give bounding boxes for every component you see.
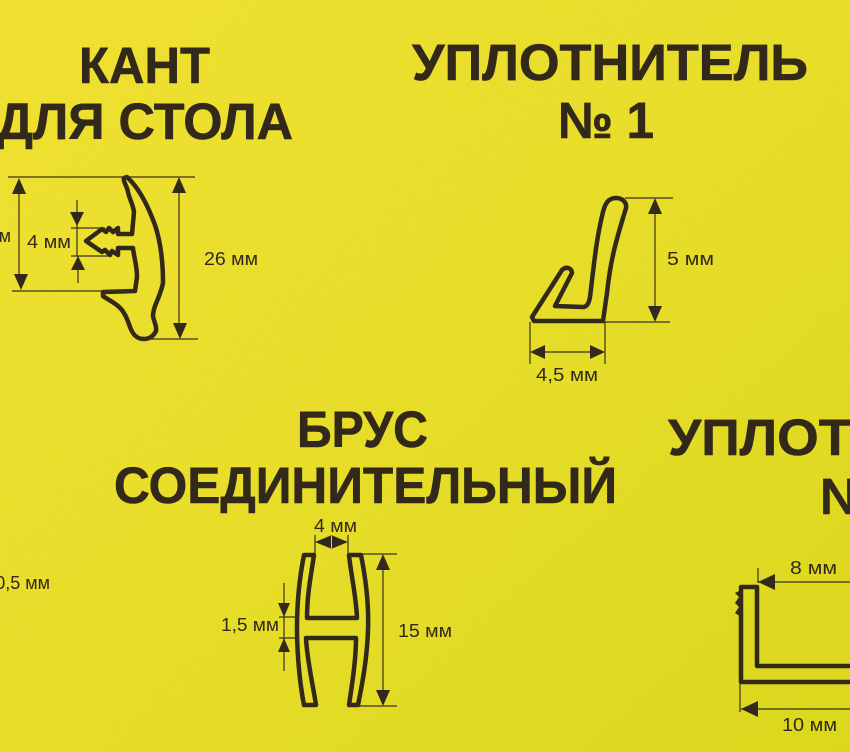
label: 26 mm: 26 мм — [204, 249, 258, 269]
label: 1.5 mm: 1,5 мм — [221, 615, 279, 635]
dimension lines: seal no. 1 — [530, 198, 673, 364]
label: 10 mm: 10 мм — [782, 715, 837, 735]
label: 15 mm: 15 мм — [398, 621, 452, 641]
dimension lines: connecting bar — [278, 535, 397, 706]
heading: connecting bar — [114, 401, 617, 514]
heading: table edging — [0, 37, 293, 150]
profile drawing: table edging — [86, 177, 163, 339]
label: 8 mm: 8 мм — [790, 558, 837, 578]
label: 5 mm: 5 мм — [667, 249, 714, 269]
panel: table edging — [0, 37, 293, 339]
profile drawing: seal no. 1 — [532, 198, 626, 321]
heading: seal no. 1: УПЛОТНИТЕЛЬ — [412, 34, 808, 91]
heading: seal no. 1 — [412, 34, 808, 149]
heading: connecting bar: СОЕДИНИТЕЛЬНЫЙ — [114, 456, 617, 514]
heading: seal no. 2 — [668, 409, 850, 525]
dimension lines: seal no. 2 — [740, 568, 850, 717]
heading: connecting bar: БРУС — [297, 401, 428, 458]
heading: table edging: КАНТ — [79, 37, 210, 94]
profile drawing: connecting bar — [297, 555, 368, 705]
heading: seal no. 1: № 1 — [558, 92, 654, 149]
profile drawing: seal no. 2 — [741, 587, 850, 682]
panel: seal no. 2 — [668, 409, 850, 735]
profile teeth — [735, 590, 741, 617]
label: 4.5 mm: 4,5 мм — [536, 365, 598, 385]
label: 4 mm: 4 мм — [314, 516, 357, 536]
dimension lines: table edging — [8, 177, 198, 339]
panel: seal no. 1 — [412, 34, 808, 385]
heading: table edging: ДЛЯ СТОЛА — [0, 93, 293, 150]
panel: connecting bar — [114, 401, 617, 706]
label: 4 mm: 4 мм — [27, 232, 71, 252]
